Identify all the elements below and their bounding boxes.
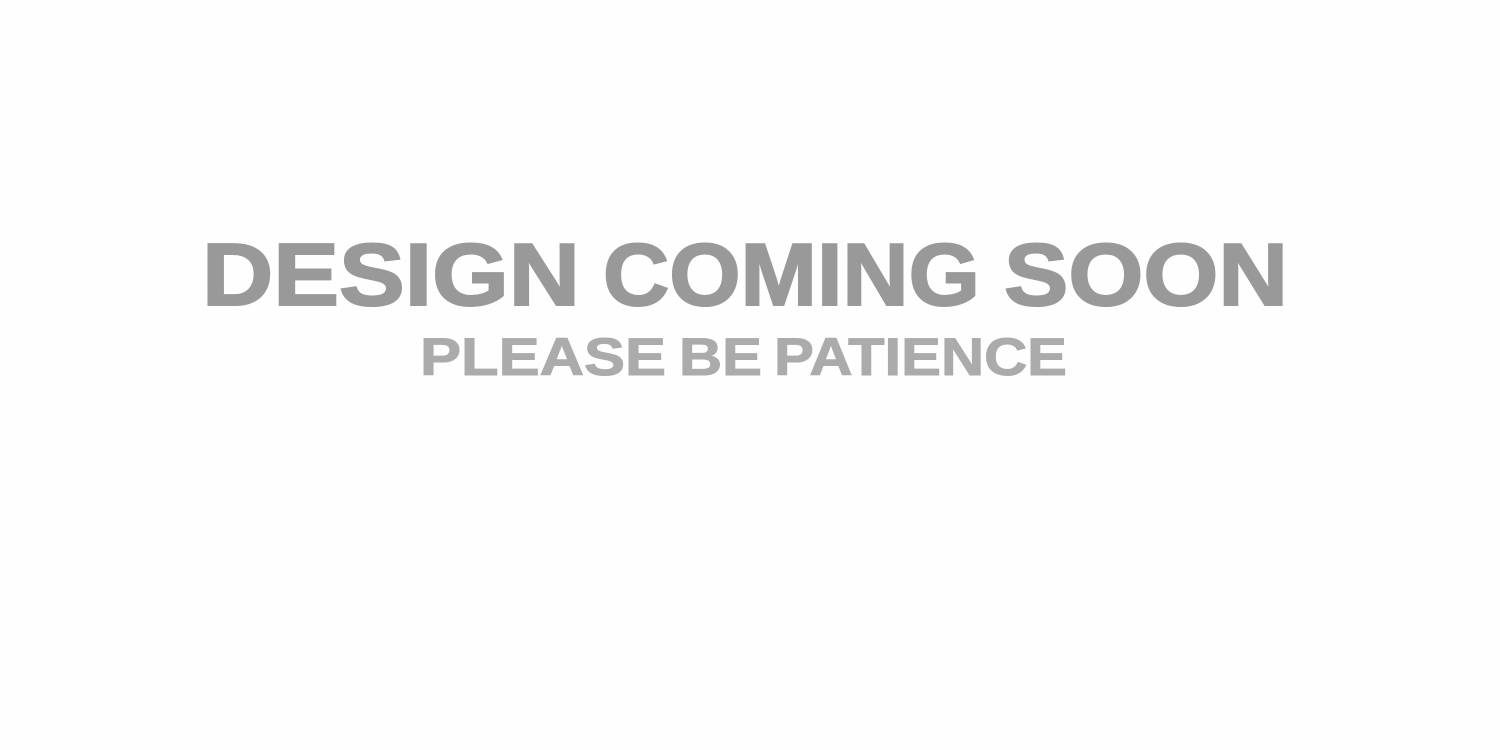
title: DESIGN — [202, 225, 580, 324]
subtitle: PLEASE — [420, 328, 666, 387]
title: SOON — [1004, 225, 1288, 324]
subtitle — [420, 328, 1067, 387]
title: COMING — [603, 225, 980, 324]
subtitle: PATIENCE — [774, 328, 1067, 387]
title — [202, 225, 1288, 324]
subtitle: BE — [679, 328, 762, 387]
